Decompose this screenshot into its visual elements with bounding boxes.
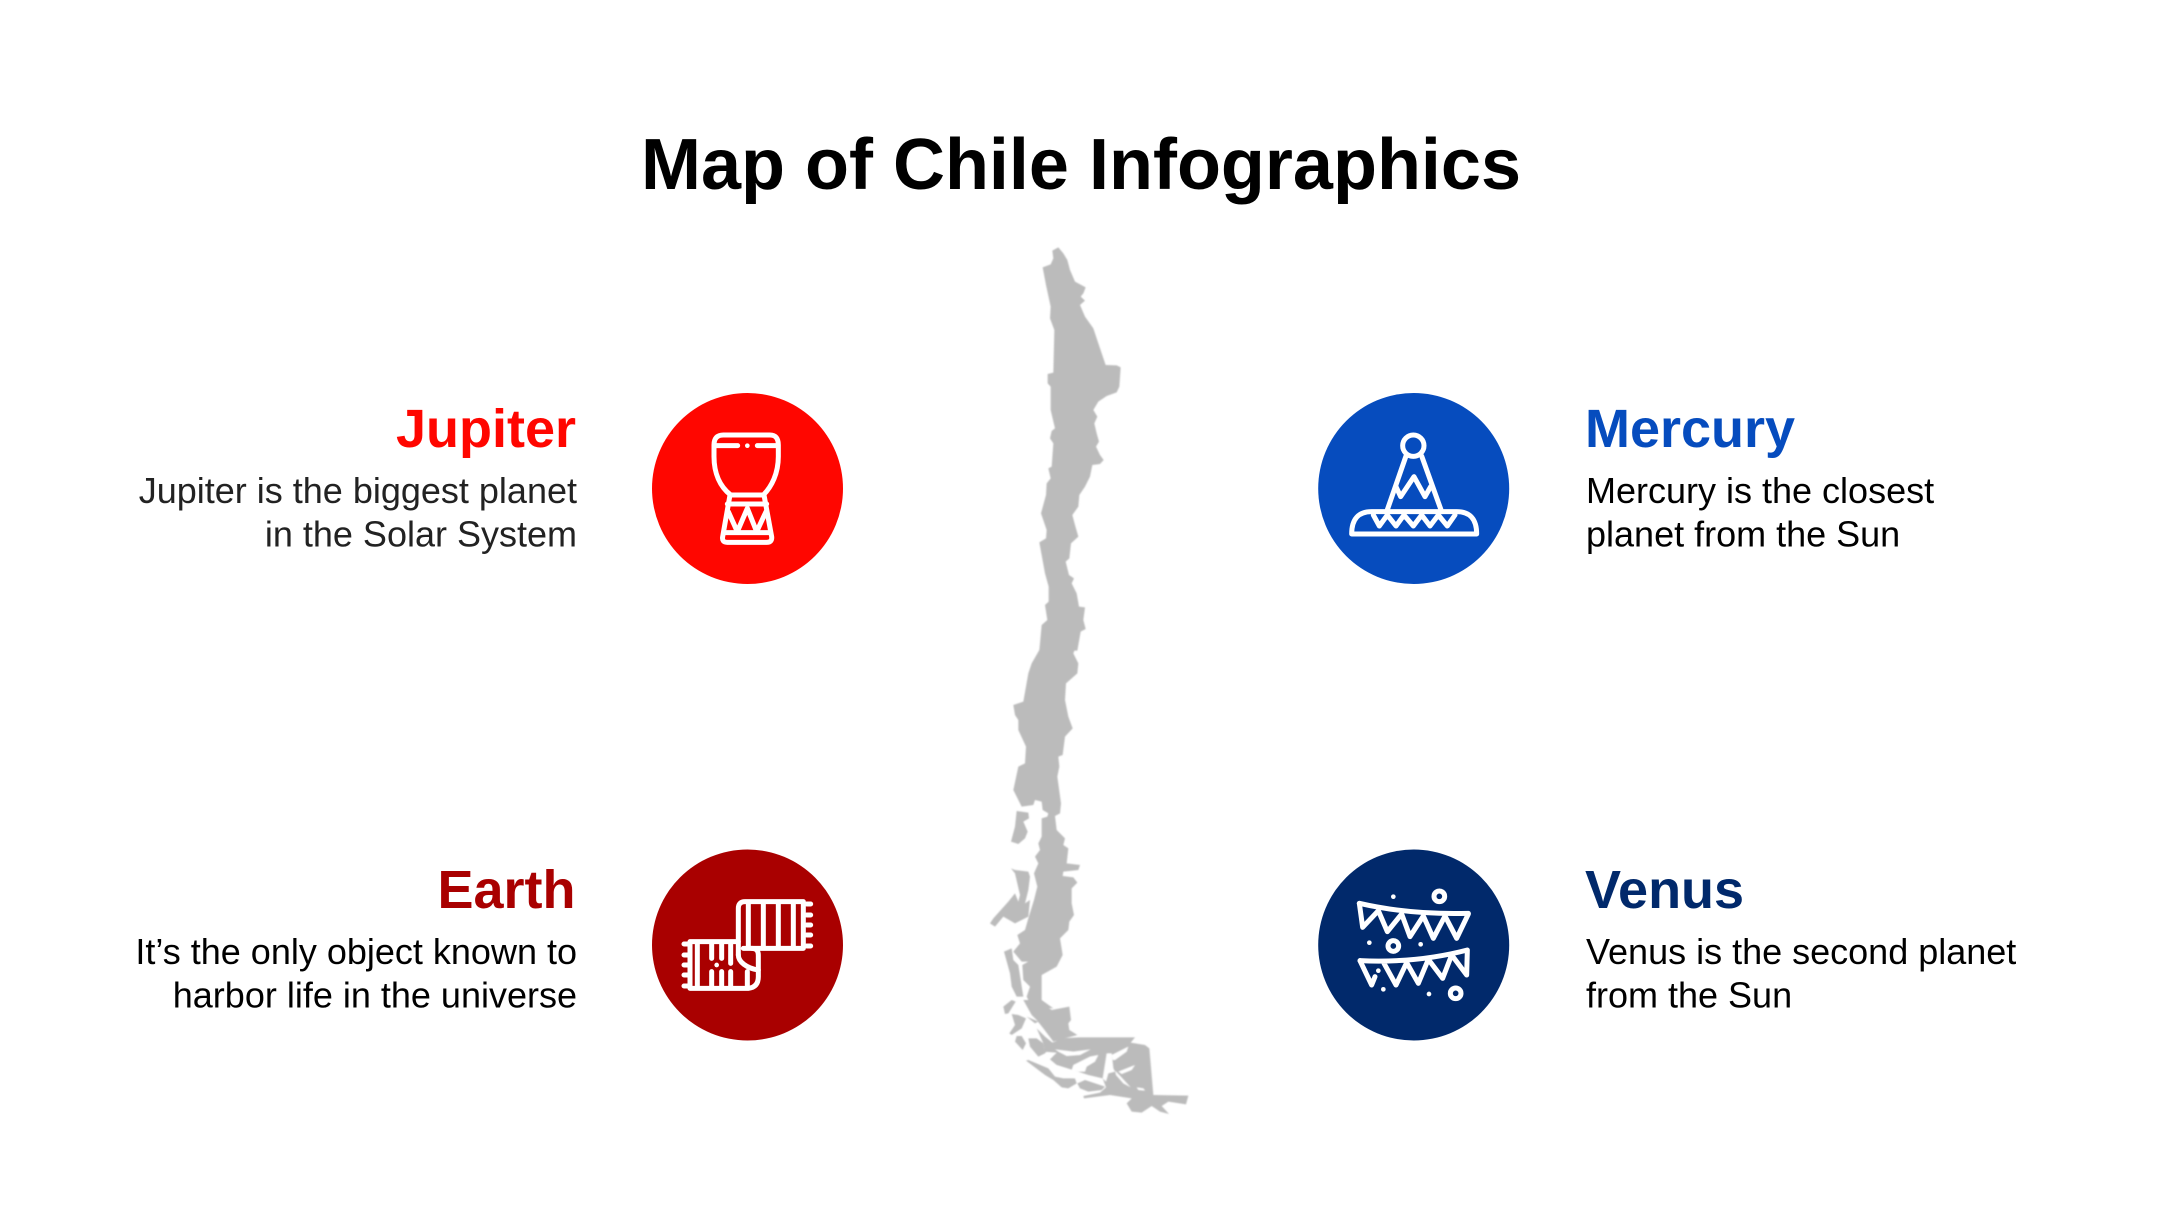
- panel: Earth: [135, 850, 843, 1040]
- text: Jupiter description: Jupiter is the biggest planet: [139, 470, 577, 511]
- panel: Venus: [1318, 850, 2016, 1040]
- text: Jupiter description: in the Solar System: [265, 514, 577, 554]
- title: Map of Chile Infographics: [641, 125, 1521, 205]
- icon: scarf: [652, 850, 843, 1040]
- text: Venus description: Venus is the second planet: [1586, 931, 2016, 972]
- icon: sombrero hat: [1318, 393, 1509, 584]
- heading: Jupiter: Jupiter: [396, 399, 576, 459]
- map of Chile: [990, 247, 1188, 1114]
- text: Mercury description: planet from the Sun: [1586, 514, 1900, 554]
- icon: bunting flags: [1318, 850, 1509, 1040]
- panel: Jupiter: [139, 393, 843, 584]
- heading: Venus: Venus: [1585, 860, 1744, 920]
- heading: Earth: Earth: [437, 860, 576, 920]
- text: Venus description: from the Sun: [1586, 974, 1792, 1016]
- icon: drum: [652, 393, 843, 584]
- heading: Mercury: Mercury: [1585, 399, 1795, 459]
- text: Earth description: It’s the only object known to: [135, 931, 577, 972]
- text: Mercury description: Mercury is the closest: [1586, 470, 1934, 511]
- panel: Mercury: [1318, 393, 1934, 584]
- text: Earth description: harbor life in the universe: [173, 974, 577, 1016]
